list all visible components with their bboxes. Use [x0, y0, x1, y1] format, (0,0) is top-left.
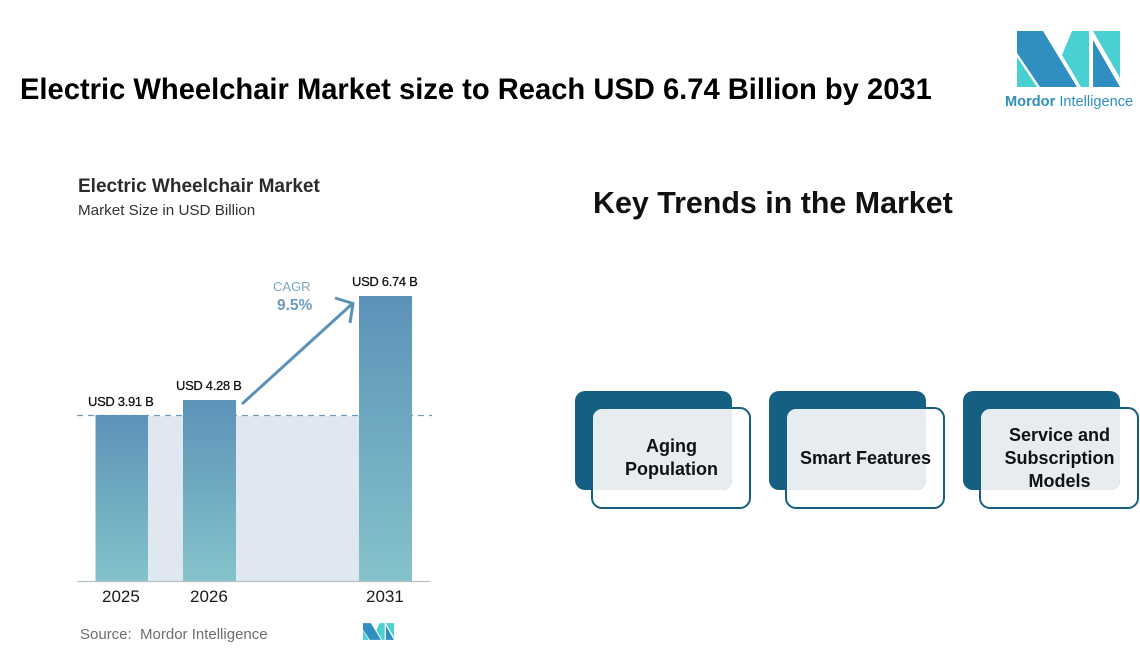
card: service and subscription models: Models — [1028, 470, 1090, 490]
chart title: Electric Wheelchair Market — [78, 176, 320, 197]
axis label 2026: 2026 — [190, 587, 228, 606]
bar: 2025 — [96, 415, 148, 581]
bar: 2026 — [183, 400, 236, 581]
axis label 2025: 2025 — [102, 587, 140, 606]
value label 2026: USD 4.28 B — [176, 378, 241, 393]
heading: key trends: Key Trends in the Market — [593, 186, 953, 220]
icon: small logo — [363, 623, 394, 640]
card: smart features — [769, 391, 945, 509]
logo: Mordor Intelligence: Mordor Intelligence — [1005, 94, 1133, 110]
source: Source: Mordor Intelligence — [80, 626, 268, 643]
card: aging population: Aging — [646, 436, 697, 456]
value label 2025: USD 3.91 B — [88, 394, 153, 409]
card: aging population — [575, 391, 751, 509]
logo: Mordor Intelligence — [1005, 31, 1133, 110]
CAGR value: 9.5% — [277, 297, 312, 314]
axis label 2031: 2031 — [366, 587, 404, 606]
value label 2031: USD 6.74 B — [352, 274, 417, 289]
CAGR label: CAGR — [273, 279, 311, 294]
card: service and subscription models: Subscription — [1004, 448, 1114, 468]
card: service and subscription models — [963, 391, 1139, 509]
title: Electric Wheelchair Market size to Reach USD 6.74 Billion by 2031 — [20, 74, 932, 106]
card: aging population: Population — [625, 459, 718, 479]
bar: 2031 — [359, 296, 412, 581]
card: smart features: Smart Features — [800, 448, 931, 468]
arrow: CAGR — [242, 298, 353, 404]
chart subtitle: Market Size in USD Billion — [78, 202, 255, 219]
card: service and subscription models: Service and — [1009, 424, 1110, 444]
